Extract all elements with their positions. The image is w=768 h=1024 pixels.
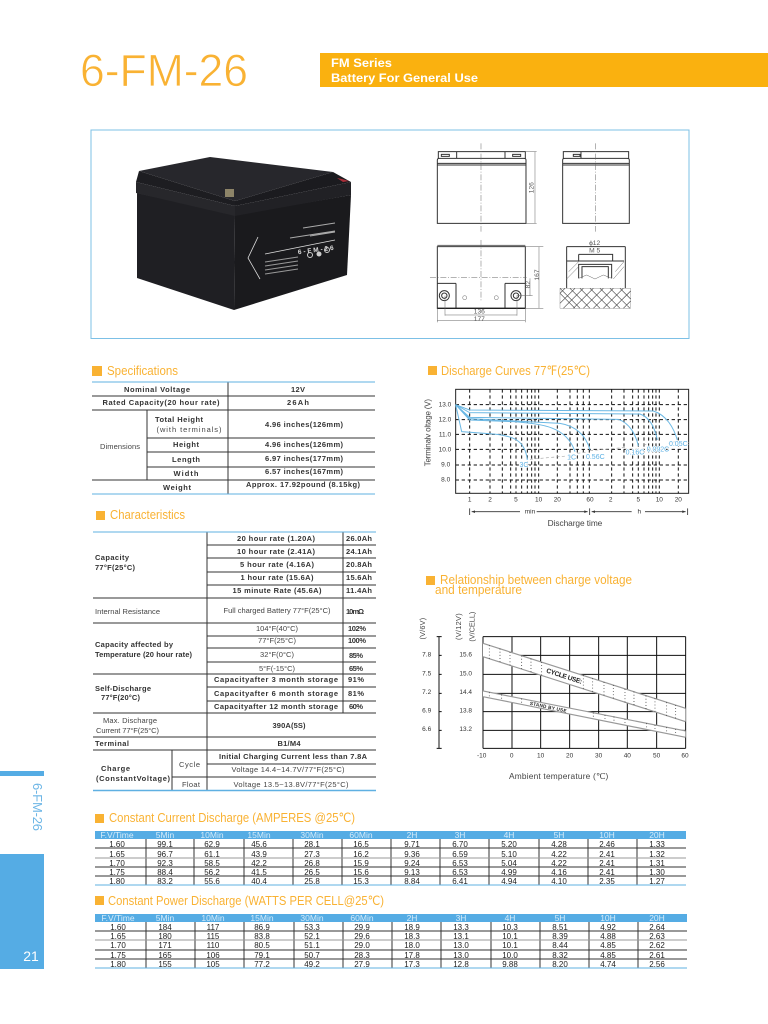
table: constant power discharge: 1.60 (110, 923, 126, 932)
table: constant power discharge: 13.1 (453, 932, 469, 941)
table: constant current discharge: 27.3 (304, 850, 320, 859)
table: characteristics: Charge (101, 764, 130, 773)
sidebar: page tab: 21 (23, 948, 39, 964)
icon: battery photo: 6-FM-26 (298, 245, 334, 256)
chart: discharge curves: 0.092C (647, 447, 669, 454)
table: constant power discharge: 4H (505, 913, 515, 923)
table: constant power discharge: 27.9 (354, 960, 370, 969)
table: constant current discharge: 2.46 (599, 840, 615, 849)
table: constant current discharge: 2H (407, 830, 417, 840)
table: constant power discharge: 1.70 (110, 941, 126, 950)
table: characteristics: 32°F(0°C) (260, 650, 294, 659)
table: specifications: 6.57 inches(167mm) (265, 467, 344, 476)
chart: charge voltage vs temperature: 20 (566, 752, 574, 759)
table: constant power discharge: 13.3 (453, 923, 469, 932)
table: constant current discharge: 15.6 (353, 868, 369, 877)
table: constant power discharge: 4.92 (600, 923, 616, 932)
table: constant power discharge: 10.1 (502, 932, 518, 941)
table: constant current discharge: 9.71 (404, 840, 420, 849)
table: characteristics: 15 minute Rate (45.6A) (232, 586, 322, 595)
banner: series (320, 53, 768, 87)
table: characteristics: Terminal (95, 739, 129, 748)
chart: charge voltage vs temperature: 0 (510, 752, 514, 759)
diagram: battery dimension drawings: ϕ12 (589, 240, 601, 247)
table: characteristics: Capacityafter 12 month storage (214, 702, 338, 711)
table: constant current discharge: 3H (455, 830, 465, 840)
diagram: battery dimension drawings: 136 (474, 309, 485, 316)
table: constant power discharge: 155 (158, 960, 172, 969)
table: constant power discharge: 4.85 (600, 941, 616, 950)
table: constant power discharge: 5H (555, 913, 565, 923)
table: constant current discharge: 60Min (349, 830, 373, 840)
table: constant power discharge: 18.0 (404, 941, 420, 950)
chart: charge voltage vs temperature: 6.9 (422, 707, 432, 714)
heading: charge voltage relationship (426, 572, 632, 597)
table: constant power discharge: 9.88 (502, 960, 518, 969)
table: characteristics: Voltage 13.5~13.8V/77°F(25°C) (234, 780, 349, 789)
table: specifications: Dimensions (100, 442, 140, 451)
chart: discharge curves: 2 (609, 497, 613, 504)
table: characteristics: 20 hour rate (1.20A) (237, 534, 316, 543)
chart: discharge curves: 10.0 (439, 446, 452, 453)
heading: constant power discharge: Constant Power Discharge (WATTS PER CELL@25℃) (108, 893, 384, 908)
table: constant power discharge: 29.0 (354, 941, 370, 950)
table: characteristics: 85% (349, 651, 363, 660)
diagram: battery dimension drawings: 126 (528, 182, 535, 193)
table: characteristics: 24.1Ah (346, 547, 372, 556)
table: characteristics: Initial Charging Current less than 7.8A (219, 752, 368, 761)
table: constant current discharge: 26.5 (304, 868, 320, 877)
chart: discharge curves: h (638, 509, 642, 516)
table: constant power discharge: 184 (158, 923, 172, 932)
table: constant current discharge: 4.28 (551, 840, 567, 849)
table: constant current discharge: 15.9 (353, 859, 369, 868)
table: constant current discharge: 16.5 (353, 840, 369, 849)
table: constant current discharge: 4H (504, 830, 514, 840)
table: characteristics: Capacity (95, 553, 130, 562)
table: constant current discharge: 1.33 (649, 840, 665, 849)
table: characteristics: Max. Discharge (103, 716, 157, 725)
table: characteristics: 91% (348, 675, 364, 684)
diagram: battery dimension drawings (430, 143, 631, 323)
table: constant current discharge: 26.8 (304, 859, 320, 868)
table: constant power discharge: 15Min (250, 913, 274, 923)
table: constant current discharge: 83.2 (157, 877, 173, 886)
table: constant power discharge: 2.56 (649, 960, 665, 969)
table: constant current discharge: 16.2 (353, 850, 369, 859)
table: constant current discharge: 1.60 (109, 840, 125, 849)
table: characteristics: 104°F(40°C) (256, 624, 298, 633)
table: constant power discharge: 80.5 (254, 941, 270, 950)
table: constant power discharge: 10.3 (502, 923, 518, 932)
table: constant current discharge: 2.41 (599, 850, 615, 859)
table: characteristics: 5 hour rate (4.16A) (240, 560, 314, 569)
chart: charge voltage vs temperature: STAND BY USE (529, 701, 567, 713)
table: constant power discharge: 83.8 (254, 932, 270, 941)
table: characteristics: Temperature (20 hour rate) (95, 650, 192, 659)
table: characteristics: Cycle (179, 760, 200, 769)
table: constant current discharge: 56.2 (204, 868, 220, 877)
table: characteristics: 11.4Ah (346, 586, 372, 595)
chart: charge voltage vs temperature (418, 612, 689, 781)
table: constant current discharge: 4.22 (551, 859, 567, 868)
chart: discharge curves: 1 (468, 497, 472, 504)
table: characteristics: 77°F(25°C) (95, 563, 136, 572)
table: constant power discharge: 8.32 (552, 951, 568, 960)
heading: specifications: Specifications (107, 363, 178, 378)
chart: discharge curves: 20 (675, 497, 682, 504)
table: constant current discharge: 99.1 (157, 840, 173, 849)
table: characteristics: 15.6Ah (346, 573, 372, 582)
table: characteristics: Capacity affected by (95, 640, 174, 649)
table: characteristics: Float (182, 780, 201, 789)
diagram: battery dimension drawings: M 5 (589, 248, 600, 255)
table: characteristics: 81% (348, 689, 364, 698)
chart: discharge curves: Discharge time (548, 518, 603, 528)
table: constant power discharge: 117 (207, 923, 220, 932)
chart: charge voltage vs temperature: 15.0 (459, 671, 472, 678)
table: constant power discharge: 2.64 (649, 923, 665, 932)
chart: discharge curves: 8.0 (441, 477, 451, 484)
table: constant current discharge: 6.59 (452, 850, 468, 859)
table: constant current discharge: 5Min (156, 830, 174, 840)
chart: charge voltage vs temperature: 50 (653, 752, 661, 759)
chart: discharge curves: min (525, 509, 536, 516)
table: constant power discharge: 2.62 (649, 941, 665, 950)
table: constant power discharge: 1.65 (110, 932, 126, 941)
table: constant power discharge: 17.8 (404, 951, 420, 960)
table: constant current discharge: 1.32 (649, 850, 665, 859)
chart: charge voltage vs temperature: 15.6 (459, 652, 472, 659)
table: characteristics: 26.0Ah (346, 534, 372, 543)
table: constant current discharge: 5.10 (501, 850, 517, 859)
table: constant current discharge: 4.10 (551, 877, 567, 886)
chart: discharge curves: 0.16C (626, 450, 644, 457)
table: constant power discharge: 5Min (156, 913, 174, 923)
table: constant power discharge: 13.0 (453, 941, 469, 950)
table: specifications: Approx. 17.92pound (8.15kg) (246, 480, 360, 489)
table: constant power discharge: 110 (207, 941, 220, 950)
chart: discharge curves: 5 (514, 497, 518, 504)
table: characteristics: 10mΩ (346, 607, 364, 616)
table: constant current discharge: 55.6 (204, 877, 220, 886)
table: specifications: 4.96 inches(126mm) (265, 420, 344, 429)
table: specifications: Length (172, 455, 200, 464)
table: characteristics: 20.8Ah (346, 560, 372, 569)
table: constant power discharge: 10.0 (502, 951, 518, 960)
table: constant current discharge: 2.41 (599, 859, 615, 868)
table: constant current discharge: 1.27 (649, 877, 665, 886)
diagram: battery dimension drawings: 82 (525, 281, 532, 288)
table: constant power discharge: 12.8 (453, 960, 469, 969)
heading: discharge curves: Discharge Curves 77℉(25℃) (441, 363, 590, 378)
table: constant power discharge: F.V/Time (101, 913, 135, 923)
table: characteristics: Internal Resistance (95, 607, 160, 616)
table: characteristics: Self-Discharge (95, 684, 151, 693)
table: constant current discharge: 2.41 (599, 868, 615, 877)
table: constant power discharge: 18.3 (404, 932, 420, 941)
table: characteristics: 102% (348, 624, 366, 633)
table: constant current discharge: 40.4 (251, 877, 267, 886)
table: constant current discharge: 9.36 (404, 850, 420, 859)
banner: series: Battery For General Use (331, 71, 478, 85)
table: constant current discharge: 25.8 (304, 877, 320, 886)
table: constant current discharge: 41.5 (251, 868, 267, 877)
table: characteristics: Full charged Battery 77°F(25°C) (224, 606, 331, 615)
table: characteristics: 10 hour rate (2.41A) (237, 547, 316, 556)
table: characteristics: Capacityafter 3 month storage (214, 675, 338, 684)
table: specifications: (with terminals) (156, 425, 222, 434)
chart: discharge curves: 13.0 (439, 402, 452, 409)
table: constant power discharge: 4.85 (600, 951, 616, 960)
heading: charge voltage relationship: Relationship between charge voltage (440, 572, 632, 587)
chart: charge voltage vs temperature: (V/CELL) (467, 612, 476, 642)
chart: charge voltage vs temperature: 30 (595, 752, 603, 759)
chart: discharge curves: 10 (656, 497, 663, 504)
table: characteristics: Current 77°F(25°C) (96, 726, 160, 735)
panel: product frame (91, 130, 689, 338)
table: constant current discharge: 5.20 (501, 840, 517, 849)
table: constant current discharge: 58.5 (204, 859, 220, 868)
table: constant current discharge: 96.7 (157, 850, 173, 859)
table: constant current discharge: 9.24 (404, 859, 420, 868)
table: characteristics: 390A(5S) (272, 721, 306, 730)
chart: discharge curves (424, 389, 689, 528)
table: specifications: 6.97 inches(177mm) (265, 454, 344, 463)
table: constant power discharge (95, 913, 687, 969)
table: constant current discharge: 42.2 (251, 859, 267, 868)
table: characteristics: 5°F(-15°C) (259, 664, 296, 673)
chart: discharge curves: 10 (535, 497, 543, 504)
table: constant current discharge: 1.30 (649, 868, 665, 877)
table: constant current discharge: 61.1 (204, 850, 220, 859)
table: constant current discharge (95, 830, 686, 886)
title: 6-FM-26 (80, 45, 248, 96)
table: constant power discharge: 115 (207, 932, 220, 941)
diagram: battery dimension drawings: 177 (474, 316, 485, 323)
chart: discharge curves: Terminalv oltage (V) (424, 399, 433, 466)
table: constant current discharge: F.V/Time (100, 830, 134, 840)
table: constant power discharge: 4.74 (600, 960, 616, 969)
chart: charge voltage vs temperature: 13.8 (459, 707, 472, 714)
table: constant power discharge: 49.2 (304, 960, 320, 969)
table: constant current discharge: 88.4 (157, 868, 173, 877)
table: constant current discharge: 45.6 (251, 840, 267, 849)
chart: discharge curves: 0.56C (586, 454, 605, 461)
table: characteristics: Voltage 14.4~14.7V/77°F(25°C) (232, 765, 345, 774)
table: constant power discharge: 20H (649, 913, 665, 923)
table: constant current discharge: 10H (599, 830, 615, 840)
table: characteristics: 1 hour rate (15.6A) (240, 573, 314, 582)
diagram: battery dimension drawings: 167 (534, 269, 541, 281)
table: characteristics: 65% (349, 664, 363, 673)
table: constant power discharge: 77.2 (254, 960, 270, 969)
table: constant power discharge: 1.75 (110, 951, 126, 960)
table: constant power discharge: 8.20 (552, 960, 568, 969)
chart: discharge curves: 12.0 (439, 416, 452, 423)
table: constant power discharge: 4.88 (600, 932, 616, 941)
table: characteristics: B1/M4 (278, 739, 301, 748)
table: constant power discharge: 18.9 (404, 923, 420, 932)
chart: charge voltage vs temperature: CYCLE USE: (545, 668, 583, 686)
chart: discharge curves: 3C (520, 462, 528, 469)
table: constant current discharge: 1.65 (109, 850, 125, 859)
banner: series: FM Series (331, 56, 392, 70)
table: constant power discharge: 13.0 (453, 951, 469, 960)
table: specifications: Height (173, 440, 200, 449)
chart: charge voltage vs temperature: (V/12V) (454, 613, 463, 640)
chart: charge voltage vs temperature: 6.6 (422, 726, 432, 733)
table: constant current discharge: 28.1 (304, 840, 320, 849)
table: constant current discharge: 4.94 (501, 877, 517, 886)
icon: battery photo (136, 157, 351, 310)
table: constant current discharge: 6.41 (452, 877, 468, 886)
table: characteristics: 100% (348, 636, 366, 645)
table: characteristics: 60% (349, 702, 363, 711)
table: constant current discharge: 4.16 (551, 868, 567, 877)
chart: discharge curves: 5 (637, 497, 641, 504)
table: constant power discharge: 17.3 (404, 960, 420, 969)
table: constant current discharge: 10Min (200, 830, 224, 840)
table: constant current discharge: 1.31 (649, 859, 665, 868)
table: specifications: 4.96 inches(126mm) (265, 440, 344, 449)
table: specifications: Total Height (155, 415, 204, 424)
chart: charge voltage vs temperature: Ambient temperature (℃) (509, 771, 609, 781)
table: constant power discharge: 29.9 (354, 923, 370, 932)
table: constant current discharge: 15Min (247, 830, 271, 840)
table: constant current discharge: 5.04 (501, 859, 517, 868)
table: constant power discharge: 180 (158, 932, 172, 941)
table: characteristics: Capacityafter 6 month storage (214, 689, 338, 698)
heading: characteristics: Characteristics (110, 507, 185, 522)
table: constant current discharge: 1.80 (109, 877, 125, 886)
chart: charge voltage vs temperature: 7.2 (422, 689, 432, 696)
heading: constant current discharge: Constant Current Discharge (AMPERES @25℃) (109, 810, 355, 825)
table: characteristics: (ConstantVoltage) (96, 774, 170, 783)
table: constant power discharge: 8.44 (552, 941, 568, 950)
table: constant power discharge: 171 (158, 941, 172, 950)
heading: charge voltage relationship: and temperature (435, 582, 522, 597)
chart: discharge curves: 0.05C (669, 441, 688, 448)
table: constant power discharge: 79.1 (254, 951, 270, 960)
table: constant current discharge: 62.9 (204, 840, 220, 849)
table: constant power discharge: 105 (206, 960, 220, 969)
table: constant power discharge: 106 (206, 951, 220, 960)
table: constant current discharge: 1.70 (109, 859, 125, 868)
table: constant current discharge: 6.70 (452, 840, 468, 849)
table: constant current discharge: 6.53 (452, 859, 468, 868)
table: specifications: Rated Capacity(20 hour rate) (102, 398, 220, 407)
table: characteristics: 77°F(20°C) (101, 693, 140, 702)
table: constant power discharge: 1.80 (110, 960, 126, 969)
table: constant power discharge: 53.3 (304, 923, 320, 932)
table: specifications: 12V (291, 385, 305, 394)
chart: discharge curves: 9.0 (441, 462, 451, 469)
table: constant power discharge: 8.39 (552, 932, 568, 941)
table: constant current discharge: 1.75 (109, 868, 125, 877)
chart: discharge curves: 20 (554, 497, 561, 504)
chart: charge voltage vs temperature: 14.4 (459, 689, 472, 696)
chart: charge voltage vs temperature: 7.5 (422, 671, 432, 678)
table: specifications: 26Ah (287, 398, 309, 407)
table: characteristics: 77°F(25°C) (258, 636, 296, 645)
table: constant current discharge: 2.35 (599, 877, 615, 886)
table: constant power discharge: 165 (158, 951, 172, 960)
table: constant power discharge: 2.61 (649, 951, 665, 960)
table: constant current discharge: 30Min (300, 830, 324, 840)
table: constant power discharge: 30Min (300, 913, 324, 923)
table: constant power discharge: 60Min (350, 913, 374, 923)
table: constant power discharge: 8.51 (552, 923, 568, 932)
table: constant power discharge: 3H (456, 913, 466, 923)
table: constant current discharge: 4.99 (501, 868, 517, 877)
table: specifications: Nominal Voltage (124, 385, 190, 394)
table: constant power discharge: 10.1 (502, 941, 518, 950)
chart: charge voltage vs temperature: 13.2 (459, 726, 472, 733)
chart: charge voltage vs temperature: 60 (681, 752, 689, 759)
chart: discharge curves: 11.0 (439, 431, 451, 438)
table: constant current discharge: 5H (554, 830, 564, 840)
table: specifications: Weight (163, 483, 192, 492)
sidebar: page tab: 6-FM-26 (30, 783, 45, 831)
table: constant power discharge: 52.1 (304, 932, 320, 941)
chart: discharge curves: 1C (567, 454, 576, 461)
table: specifications (92, 382, 375, 494)
table: constant power discharge: 2.63 (649, 932, 665, 941)
table: constant power discharge: 86.9 (254, 923, 270, 932)
table: constant power discharge: 51.1 (304, 941, 320, 950)
sidebar: page tab (0, 771, 45, 969)
chart: charge voltage vs temperature: 10 (537, 752, 545, 759)
table: constant current discharge: 9.13 (404, 868, 420, 877)
table: constant power discharge: 28.3 (354, 951, 370, 960)
table: constant power discharge: 10Min (201, 913, 225, 923)
chart: charge voltage vs temperature: -10 (477, 752, 487, 759)
table: constant power discharge: 50.7 (304, 951, 320, 960)
table: constant current discharge: 92.3 (157, 859, 173, 868)
chart: discharge curves: 2 (488, 497, 492, 504)
table: constant current discharge: 43.9 (251, 850, 267, 859)
table: constant power discharge: 10H (600, 913, 616, 923)
table: constant current discharge: 8.84 (404, 877, 420, 886)
table: constant power discharge: 29.6 (354, 932, 370, 941)
chart: charge voltage vs temperature: 7.8 (422, 652, 432, 659)
table: constant current discharge: 15.3 (353, 877, 369, 886)
chart: discharge curves: 60 (586, 497, 594, 504)
table: characteristics (93, 532, 376, 790)
table: constant current discharge: 4.22 (551, 850, 567, 859)
table: specifications: Width (174, 469, 199, 478)
chart: charge voltage vs temperature: (V/6V) (418, 618, 427, 639)
table: constant current discharge: 20H (649, 830, 665, 840)
chart: charge voltage vs temperature: 40 (624, 752, 631, 759)
table: constant power discharge: 2H (407, 913, 417, 923)
table: constant current discharge: 6.53 (452, 868, 468, 877)
